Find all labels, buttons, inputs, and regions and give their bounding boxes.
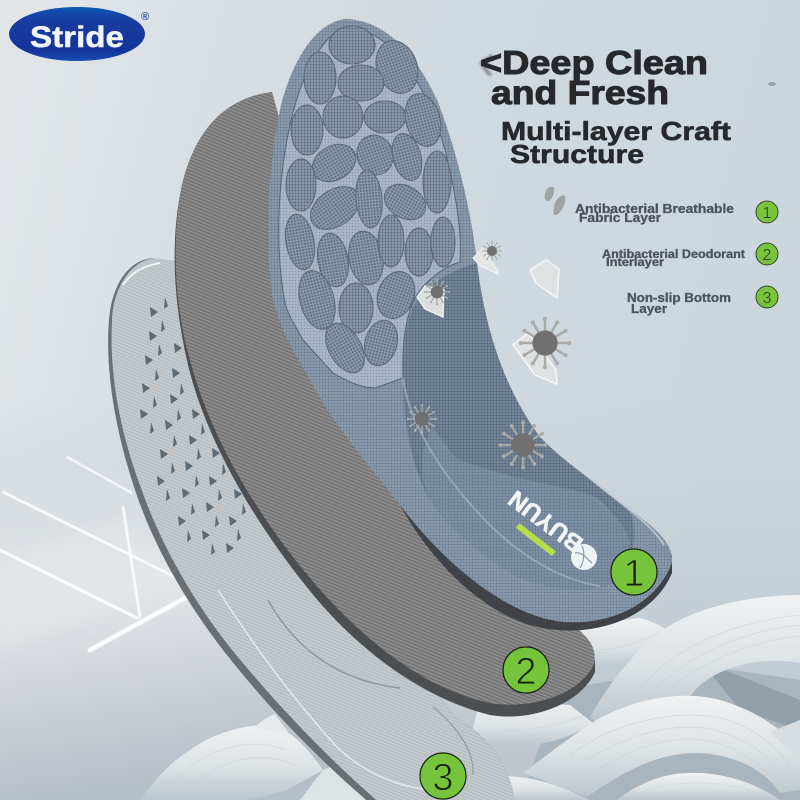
layer badge 3: 3 <box>432 757 454 799</box>
insole layer 1: antibacterial breathable fabric layer <box>268 19 672 631</box>
layer badge 2 <box>503 647 549 693</box>
decorative smudge beside heading <box>479 54 495 76</box>
heading: and Fresh <box>491 74 669 111</box>
logo <box>9 7 149 61</box>
brand mark: BUYUN <box>504 485 588 557</box>
heel insert <box>422 427 630 590</box>
legend badge 1 <box>756 201 778 223</box>
legend label 1: Antibacterial Breathable <box>575 202 734 216</box>
dimples <box>140 297 246 555</box>
legend label 2: Antibacterial Deodorant <box>602 249 745 261</box>
icon: virus on shield 2 <box>424 279 450 305</box>
forefoot panel <box>279 27 460 388</box>
legend label 1: Fabric Layer <box>579 211 661 225</box>
icon: virus large <box>519 317 571 369</box>
logo: Stride <box>30 21 124 54</box>
layer legend <box>575 202 745 316</box>
icon: virus heel <box>499 421 547 469</box>
icon: footprints <box>545 187 565 215</box>
layer badge 3 <box>420 753 466 799</box>
top surface <box>268 19 672 622</box>
heading <box>480 44 731 169</box>
icon: shield 1 <box>473 248 498 274</box>
legend badge 2: 2 <box>763 247 772 264</box>
icon: virus small <box>482 241 502 261</box>
legend badge 3 <box>756 286 778 308</box>
icon: shield 2 <box>417 286 444 317</box>
underside <box>400 500 672 631</box>
legend badge 3: 3 <box>763 290 772 307</box>
light rays <box>0 457 187 650</box>
rim highlight <box>403 378 600 586</box>
layer badge 1 <box>611 549 657 595</box>
heading: <Deep Clean <box>480 44 708 81</box>
heading: Multi-layer Craft <box>501 116 731 146</box>
background white tubes <box>140 595 800 800</box>
legend label 3: Layer <box>631 302 667 316</box>
legend label 1 <box>575 202 734 225</box>
icon: shield 4 <box>513 333 557 384</box>
legend label 3 <box>627 291 731 316</box>
legend badge 2 <box>756 243 778 265</box>
logo: ® <box>141 11 149 23</box>
insole layer 3: non-slip bottom layer <box>108 258 515 800</box>
pebble massage nodes <box>281 26 455 379</box>
tube ridges <box>170 615 800 792</box>
legend label 3: Non-slip Bottom <box>627 291 731 305</box>
legend label 2 <box>602 249 745 269</box>
heel and arch contour lines <box>123 263 473 790</box>
shields and virus icons <box>407 54 776 469</box>
legend label 2: Interlayer <box>606 257 665 269</box>
heading: Structure <box>510 139 644 169</box>
decorative smudge top right <box>768 82 776 86</box>
insole layer 2: antibacterial deodorant interlayer <box>175 92 595 717</box>
arch and heel panel <box>403 263 634 590</box>
icon: virus arch <box>407 404 437 434</box>
legend badge 1: 1 <box>763 205 772 222</box>
icon: shield 3 <box>530 260 559 298</box>
layer badge 1: 1 <box>623 553 645 595</box>
layer badge 2: 2 <box>515 651 537 693</box>
